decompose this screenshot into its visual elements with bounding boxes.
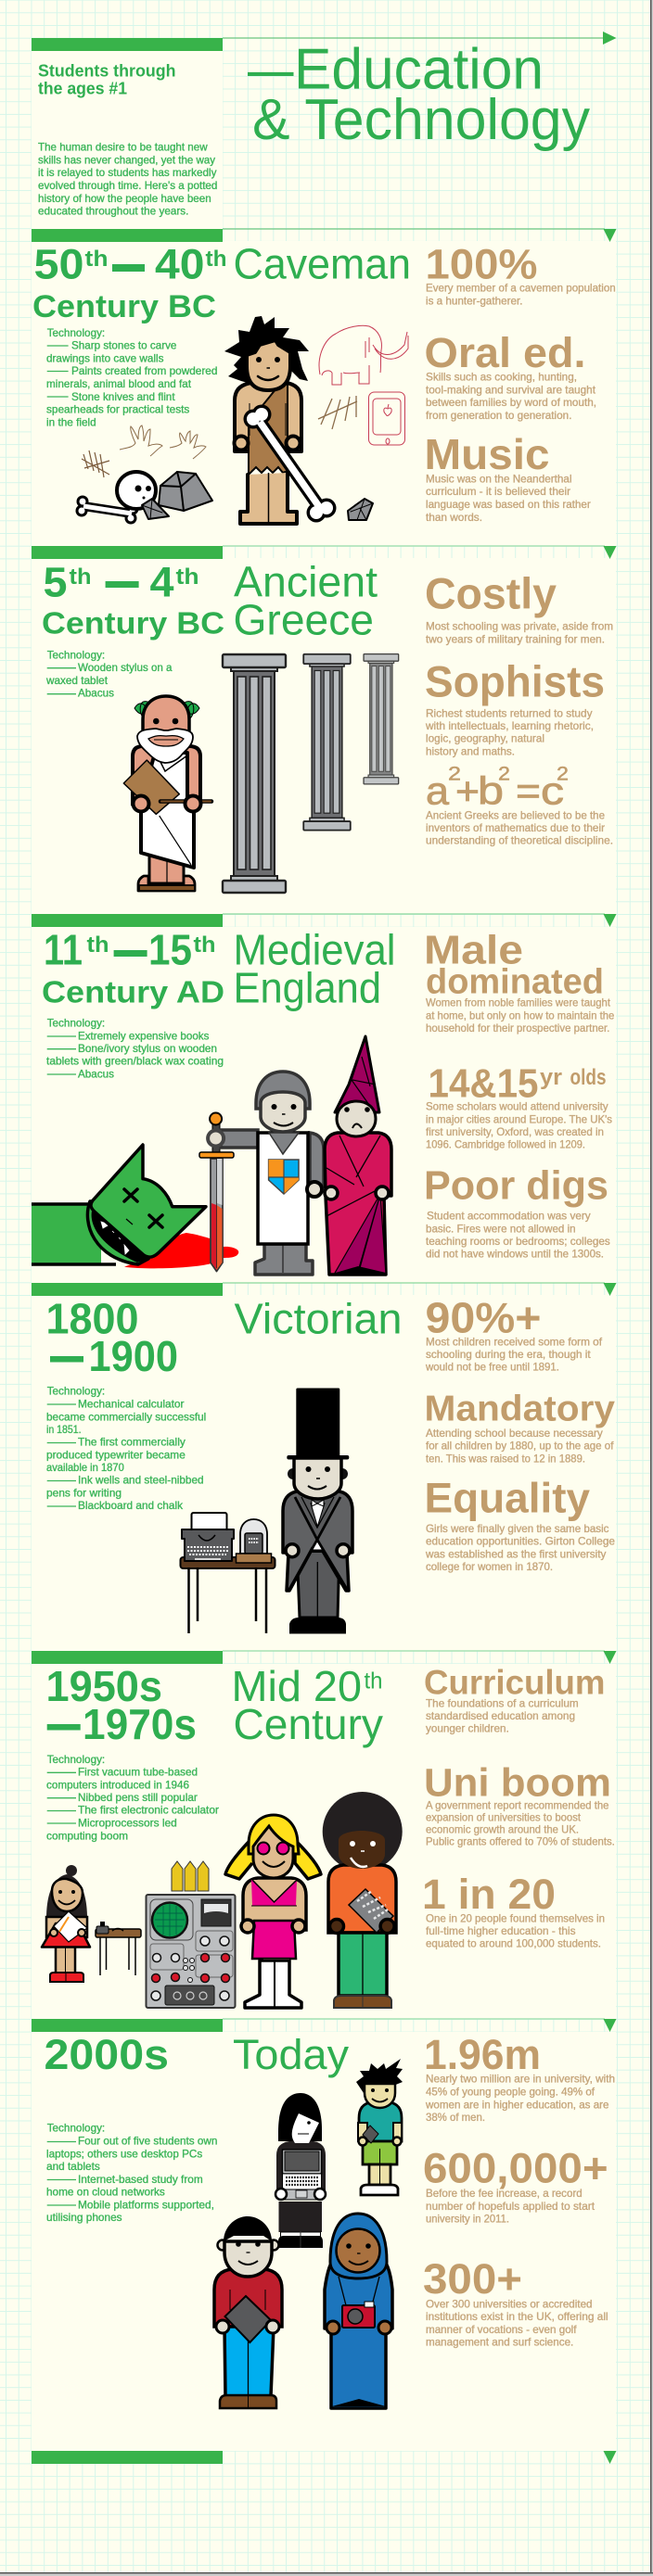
title: Education: [294, 37, 544, 102]
technology list: drawings into cave walls: [46, 351, 163, 364]
intro text: it is relayed to students has markedly: [38, 166, 217, 179]
stat: sophists: [425, 657, 605, 757]
icon: tally sketch: [318, 396, 357, 429]
icon: skull: [117, 472, 156, 509]
heading: date range: 4: [150, 558, 174, 605]
panel: victorian: [32, 1283, 616, 1633]
stat: sophists: with intellectuals, learning rhetoric,: [425, 719, 594, 732]
technology list: Technology:: [47, 2122, 105, 2135]
technology list: [46, 1753, 219, 1842]
stat: oral ed: Oral ed.: [425, 329, 586, 376]
heading: date range: th: [87, 933, 109, 958]
stat: 1 in 20: full-time higher education - this: [426, 1924, 576, 1937]
stat: equality: Equality: [425, 1475, 591, 1522]
technology list: Nibbed pens still popular: [78, 1791, 198, 1804]
stat: music: Music: [425, 430, 549, 478]
icon: medium column: [303, 654, 351, 831]
stat: 100%: Every member of a cavemen population: [426, 282, 616, 295]
stat: poor digs: Student accommodation was very: [427, 1210, 591, 1223]
heading: ancient greece: [234, 557, 378, 643]
heading: mid 20th century: Mid 20: [232, 1662, 362, 1710]
stat: male dominated: [424, 927, 615, 1034]
stat: uni boom: Uni boom: [424, 1761, 611, 1806]
panel: today: [32, 2019, 616, 2408]
stat: uni boom: Public grants offered to 70% of students.: [426, 1834, 615, 1847]
heading: date range: [32, 240, 226, 324]
figure: victorian gentleman: [283, 1389, 352, 1633]
intro text: [38, 141, 217, 217]
heading: date range: 5: [43, 558, 67, 605]
heading: date range: 1970s: [83, 1700, 197, 1748]
divider bar with arrow: header: [32, 32, 616, 51]
icon: rock: [159, 472, 212, 511]
stat: costly: two years of military training for men.: [426, 633, 605, 646]
icon: flint: [142, 499, 169, 519]
stat: male dominated: at home, but only on how to maintain the: [426, 1009, 615, 1022]
stat: 300+: 300+: [423, 2255, 522, 2303]
technology list: Technology:: [47, 1016, 105, 1029]
heading: date range: Century AD: [42, 975, 224, 1009]
stat: 1 in 20: [422, 1871, 605, 1950]
panel: mid 20th century: [32, 1651, 616, 2008]
heading: ancient greece: Greece: [234, 595, 374, 643]
title: [248, 37, 591, 152]
stat: oral ed: [425, 329, 596, 422]
heading: students through the ages: Students through: [38, 60, 176, 80]
title: & Technology: [252, 87, 591, 152]
heading: date range: th: [69, 565, 91, 590]
icon: cave hand drawings: [120, 425, 206, 459]
technology list: computers introduced in 1946: [46, 1778, 189, 1791]
stat: 1.96m: 38% of men.: [426, 2111, 485, 2124]
stat: equality: was established as the first university: [425, 1547, 606, 1560]
stat: pythagoras: c: [541, 769, 564, 813]
divider bar with arrow: [32, 914, 616, 927]
figure: greek philosopher: [123, 696, 211, 891]
technology list: Bone/ivory stylus on wooden: [78, 1042, 217, 1055]
icon: desk with typewriter and calculator: [180, 1513, 275, 1633]
technology list: The first electronic calculator: [78, 1804, 219, 1817]
figure: man with afro and calculator: [323, 1792, 403, 2008]
stat: equality: Girls were finally given the same basic: [426, 1522, 608, 1535]
heading: date range: 50: [33, 240, 83, 287]
stat: 1.96m: 1.96m: [424, 2031, 541, 2078]
heading: date range: 15: [148, 926, 192, 974]
icon: small desk with ink: [96, 1922, 141, 1975]
divider bar with arrow: footer: [32, 2451, 616, 2464]
heading: mid 20th century: Century: [234, 1700, 383, 1748]
technology list: became commercially successful: [46, 1410, 206, 1423]
stat: pythagoras: a: [426, 769, 450, 813]
technology list: Technology:: [47, 326, 105, 339]
heading: date range: th: [85, 247, 108, 272]
technology list: home on cloud networks: [46, 2186, 165, 2199]
stat: 90 percent plus: schooling during the era, though it: [426, 1348, 591, 1361]
technology list: Ink wells and steel-nibbed: [78, 1474, 204, 1487]
stat: 100%: 100%: [425, 240, 538, 287]
divider bar with arrow: [32, 1283, 616, 1296]
technology list: Abacus: [78, 1067, 114, 1080]
stat: uni boom: A government report recommended the: [426, 1798, 609, 1811]
stat: 600,000+: number of hopefuls applied to start: [426, 2200, 595, 2213]
figure: boy in teal with phone: [356, 2059, 403, 2195]
heading: 2000s: 2000s: [45, 2031, 169, 2078]
stat: poor digs: Poor digs: [424, 1162, 608, 1208]
stat: uni boom: [424, 1761, 615, 1847]
stat: 600,000+: university in 2011.: [426, 2212, 509, 2225]
stat: pythagoras: b: [478, 769, 504, 813]
divider bar with arrow: [32, 1651, 616, 1664]
stat: music: [425, 430, 591, 524]
figure: goth girl with laptop: [275, 2093, 326, 2248]
stat: pythagoras: inventors of mathematics due to their: [426, 821, 605, 834]
technology list: Technology:: [47, 648, 105, 661]
heading: date range: th: [176, 565, 198, 590]
technology list: spearheads for practical tests: [46, 403, 189, 416]
stat: poor digs: did not have windows until the 1300s.: [426, 1248, 604, 1261]
stat: 300+: Over 300 universities or accredited: [426, 2297, 592, 2310]
intro text: evolved through time. Here's a potted: [38, 179, 217, 192]
technology list: laptops; others use desktop PCs: [46, 2147, 202, 2160]
technology list: in the field: [46, 415, 96, 428]
stat: music: Music was on the Neanderthal: [426, 473, 571, 486]
stat: sophists: Richest students returned to study: [426, 706, 592, 719]
stat: 1.96m: [424, 2031, 615, 2124]
heading: date range: [46, 1662, 197, 1748]
technology list: Abacus: [78, 686, 114, 699]
stat: mandatory: ten. This was raised to 12 in 1889.: [426, 1452, 585, 1465]
figure: noblewoman: [325, 1036, 391, 1275]
stat: 100%: is a hunter-gatherer.: [426, 294, 523, 307]
stat: 600,000+: 600,000+: [423, 2145, 608, 2192]
technology list: produced typewriter became: [46, 1448, 186, 1461]
stat: mandatory: for all children by 1880, up to the age of: [426, 1440, 614, 1453]
heading: mid 20th century: th: [364, 1669, 382, 1694]
heading: date range: [42, 558, 224, 640]
heading: medieval england: Medieval: [234, 926, 395, 974]
technology list: utilising phones: [46, 2211, 122, 2224]
technology list: in 1851.: [46, 1423, 82, 1436]
divider bar with arrow: [32, 229, 616, 242]
technology list: Four out of five students own: [78, 2135, 217, 2148]
stat: oral ed: between families by word of mouth,: [426, 396, 596, 409]
heading: date range: 1950s: [46, 1662, 162, 1710]
technology list: Sharp stones to carve: [71, 339, 177, 352]
technology list: and tablets: [46, 2160, 100, 2173]
stat: costly: Most schooling was private, aside from: [426, 619, 613, 632]
stat: 14 and 15 year olds: in major cities around Europe. The UK's: [426, 1112, 612, 1125]
stat: curriculum: younger children.: [426, 1722, 509, 1735]
stat: music: language was based on this rather: [426, 498, 591, 511]
heading: victorian: Victorian: [234, 1294, 403, 1342]
technology list: Mechanical calculator: [78, 1397, 185, 1410]
stat: sophists: history and maths.: [426, 744, 515, 757]
stat: mandatory: Mandatory: [425, 1390, 615, 1429]
intro text: skills has never changed, yet the way: [38, 153, 215, 166]
technology list: [45, 648, 173, 699]
stat: costly: [425, 569, 613, 646]
divider bar with arrow: [32, 2019, 616, 2032]
stat: pythagoras: =: [516, 769, 541, 813]
technology list: available in 1870: [46, 1461, 124, 1474]
stat: curriculum: [424, 1663, 605, 1735]
figure: girl with notepad: [42, 1865, 90, 1982]
technology list: [46, 2122, 217, 2224]
stat: curriculum: standardised education among: [426, 1709, 575, 1722]
stat: sophists: Sophists: [425, 657, 605, 706]
stat: 600,000+: [423, 2145, 608, 2225]
technology list: Technology:: [47, 1753, 105, 1766]
stat: male dominated: household for their prospective partner.: [426, 1022, 609, 1034]
heading: date range: 40: [155, 240, 204, 287]
technology list: Stone knives and flint: [71, 390, 175, 403]
intro text: educated throughout the years.: [38, 204, 188, 217]
heading: caveman: Caveman: [234, 239, 411, 287]
stat: 300+: [423, 2255, 608, 2349]
stat: mandatory: [425, 1390, 615, 1465]
stat: pythagoras: Ancient Greeks are believed to be the: [426, 808, 605, 821]
icon: tablet sketch: [369, 392, 404, 445]
technology list: Paints created from powdered: [71, 364, 217, 377]
stat: music: than words.: [426, 511, 482, 524]
technology list: tablets with green/black wax coating: [46, 1055, 224, 1068]
divider bar with arrow: [32, 546, 616, 559]
figure: student with tablet: [214, 2216, 282, 2408]
icon: flint right: [348, 499, 373, 520]
heading: date range: [42, 926, 224, 1009]
figure: hippie girl: [225, 1815, 321, 2008]
stat: pythagoras: understanding of theoretical discipline.: [426, 834, 613, 847]
icon: large column: [223, 654, 286, 893]
technology list: Microprocessors led: [78, 1817, 177, 1830]
technology list: [46, 326, 217, 428]
technology list: waxed tablet: [45, 674, 109, 687]
heading: date range: 11: [44, 926, 83, 974]
heading: date range: th: [193, 933, 215, 958]
heading: date range: th: [206, 247, 226, 272]
stat: equality: college for women in 1870.: [426, 1560, 553, 1573]
stat: pythagoras: 2: [448, 764, 461, 785]
heading: ancient greece: Ancient: [234, 557, 378, 605]
stat: pythagoras: 2: [498, 764, 510, 785]
stat: music: curriculum - it is believed their: [426, 485, 570, 498]
heading: today: Today: [233, 2031, 350, 2078]
panel: caveman: [32, 229, 616, 525]
icon: small column: [364, 654, 399, 784]
technology list: Wooden stylus on a: [78, 661, 173, 674]
stat: oral ed: Skills such as cooking, hunting,: [426, 371, 577, 384]
heading: medieval england: [234, 926, 395, 1012]
stat: 90 percent plus: [425, 1293, 603, 1374]
intro text: history of how the people have been: [38, 192, 211, 205]
stat: male dominated: Male: [424, 927, 523, 972]
stat: sophists: logic, geography, natural: [426, 732, 544, 745]
stat: 14 and 15 year olds: Some scholars would attend university: [426, 1100, 608, 1113]
stat: uni boom: expansion of universities to boost: [426, 1810, 582, 1823]
stat: 1 in 20: 1 in 20: [422, 1871, 556, 1918]
technology list: Mobile platforms supported,: [78, 2198, 214, 2211]
stat: 1.96m: women are in higher education, as are: [425, 2098, 609, 2111]
stat: poor digs: basic. Fires were not allowed in: [426, 1222, 576, 1235]
heading: students through the ages: the ages #1: [38, 78, 127, 97]
heading: medieval england: England: [234, 964, 381, 1012]
figure: knight with sword: [199, 1072, 324, 1275]
stat: 14 and 15 year olds: 1096. Cambridge followed in 1209.: [426, 1138, 585, 1151]
panel: medieval england: [32, 914, 616, 1275]
stat: 300+: manner of vocations - even golf: [426, 2323, 577, 2336]
stat: curriculum: The foundations of a curriculum: [426, 1696, 579, 1709]
technology list: pens for writing: [46, 1486, 122, 1499]
stat: 300+: institutions exist in the UK, offering all: [426, 2310, 608, 2323]
heading: mid 20th century: [232, 1662, 383, 1748]
stat: 1 in 20: One in 20 people found themselves in: [426, 1911, 605, 1924]
stat: 14 and 15 year olds: yr: [540, 1065, 562, 1090]
figure: slain dragon and blood: [32, 1145, 238, 1268]
stat: 90 percent plus: 90%+: [425, 1293, 542, 1341]
stat: curriculum: Curriculum: [424, 1663, 605, 1701]
technology list: computing boom: [46, 1829, 128, 1842]
technology list: minerals, animal blood and fat: [46, 377, 192, 390]
stat: mandatory: Attending school because necessary: [426, 1427, 603, 1440]
stat: 300+: management and surf science.: [426, 2336, 573, 2349]
figure: caveman: [224, 316, 336, 524]
stat: poor digs: [424, 1162, 610, 1261]
heading: students through the ages: [38, 60, 176, 97]
heading: date range: 1900: [89, 1332, 178, 1380]
stat: pythagoras: [426, 764, 613, 847]
technology list: First vacuum tube-based: [78, 1766, 198, 1779]
heading: date range: Century BC: [42, 605, 224, 640]
technology list: Extremely expensive books: [78, 1029, 209, 1042]
technology list: Internet-based study from: [78, 2173, 203, 2186]
stat: costly: Costly: [425, 569, 557, 618]
icon: mammoth sketch: [319, 325, 408, 385]
technology list: Technology:: [47, 1385, 105, 1398]
stat: oral ed: from generation to generation.: [426, 409, 571, 422]
heading: date range: 1800: [46, 1294, 139, 1342]
icon: bone: [76, 495, 139, 525]
heading: date range: [46, 1294, 178, 1380]
stat: 90 percent plus: Most children received some form of: [426, 1335, 603, 1348]
stat: male dominated: dominated: [426, 963, 604, 1002]
stat: 600,000+: Before the fee increase, a record: [426, 2187, 583, 2200]
stat: male dominated: Women from noble families were taught: [426, 996, 611, 1009]
stat: equality: [425, 1475, 615, 1573]
technology list: The first commercially: [78, 1436, 186, 1449]
heading: date range: Century BC: [32, 289, 216, 324]
technology list: Blackboard and chalk: [78, 1499, 184, 1512]
stat: 14 and 15 year olds: olds: [570, 1065, 607, 1090]
stat: poor digs: teaching rooms or bedrooms; colleges: [426, 1235, 610, 1248]
stat: 14 and 15 year olds: 14&15: [429, 1060, 538, 1106]
stat: equality: education opportunities. Girton College: [426, 1535, 615, 1548]
stat: pythagoras: +: [455, 769, 480, 813]
stat: 100%: [425, 240, 616, 307]
icon: computer machine with vacuum tubes: [147, 1861, 236, 2008]
stat: oral ed: tool-making and survival are taught: [426, 383, 596, 396]
stat: 90 percent plus: would not be free until 1891.: [425, 1361, 559, 1374]
icon: tally marks: [82, 450, 109, 477]
stat: pythagoras: 2: [557, 764, 569, 785]
stat: uni boom: economic growth around the UK.: [426, 1822, 579, 1835]
technology list: [46, 1385, 206, 1512]
panel: ancient greece: [32, 546, 616, 893]
stat: 1 in 20: equated to around 100,000 students.: [426, 1937, 601, 1950]
technology list: [46, 1016, 224, 1080]
stat: 1.96m: Nearly two million are in university, with: [426, 2072, 615, 2085]
figure: student in hijab with camera: [325, 2214, 392, 2408]
title: —: [248, 37, 294, 102]
stat: 14 and 15 year olds: [426, 1060, 612, 1151]
stat: 14 and 15 year olds: first university, Oxford, was created in: [426, 1125, 604, 1138]
stat: 1.96m: 45% of young people going. 49% of: [426, 2085, 595, 2098]
intro text: The human desire to be taught new: [38, 141, 208, 154]
